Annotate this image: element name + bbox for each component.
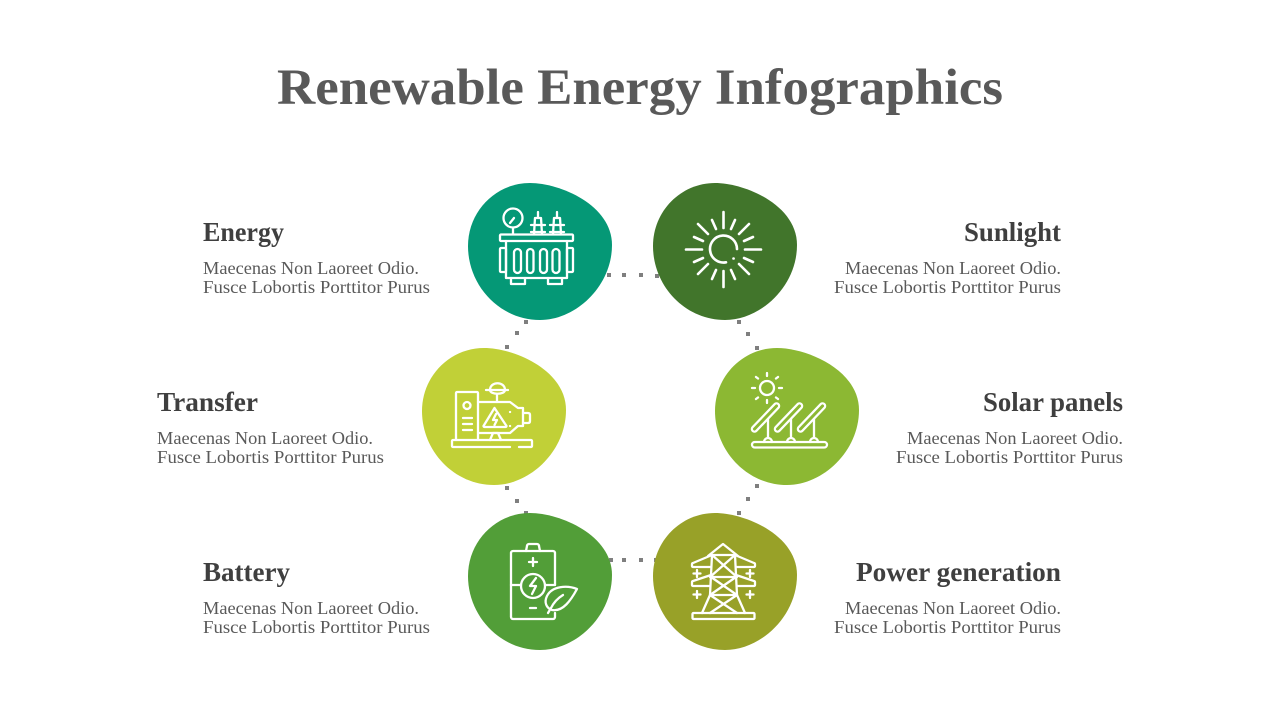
solar panels description: Maecenas Non Laoreet Odio. xyxy=(907,428,1123,448)
icon: transformer xyxy=(500,208,573,284)
solar panels heading: Solar panels xyxy=(983,387,1123,417)
icon: solar panels xyxy=(752,373,827,448)
transfer description: Maecenas Non Laoreet Odio. xyxy=(157,428,373,448)
icon: pylon xyxy=(692,544,755,619)
sunlight blob xyxy=(653,183,797,320)
power generation heading: Power generation xyxy=(856,557,1061,587)
solar panels description xyxy=(896,428,1123,467)
transfer description xyxy=(157,428,384,467)
solar panels blob xyxy=(715,348,859,485)
energy blob xyxy=(468,183,612,320)
transfer heading: Transfer xyxy=(157,387,258,417)
sunlight description: Maecenas Non Laoreet Odio. xyxy=(845,258,1061,278)
panel: sunlight xyxy=(653,183,1061,320)
battery blob xyxy=(468,513,612,650)
panel: solar panels xyxy=(715,348,1123,485)
energy description: Fusce Lobortis Porttitor Purus xyxy=(203,277,430,297)
icon: generator xyxy=(452,383,532,447)
solar panels description: Fusce Lobortis Porttitor Purus xyxy=(896,447,1123,467)
icon: sun xyxy=(686,212,761,287)
battery heading: Battery xyxy=(203,557,290,587)
panel: power generation xyxy=(653,513,1061,650)
sunlight description xyxy=(834,258,1061,297)
title: Renewable Energy Infographics xyxy=(277,60,1003,116)
power generation description: Fusce Lobortis Porttitor Purus xyxy=(834,617,1061,637)
sunlight heading: Sunlight xyxy=(964,217,1061,247)
transfer description: Fusce Lobortis Porttitor Purus xyxy=(157,447,384,467)
energy description xyxy=(203,258,430,297)
power generation blob xyxy=(653,513,797,650)
panel: energy xyxy=(203,183,612,320)
battery description: Maecenas Non Laoreet Odio. xyxy=(203,598,419,618)
energy description: Maecenas Non Laoreet Odio. xyxy=(203,258,419,278)
power generation description xyxy=(834,598,1061,637)
energy heading: Energy xyxy=(203,217,284,247)
panel: battery xyxy=(203,513,612,650)
power generation description: Maecenas Non Laoreet Odio. xyxy=(845,598,1061,618)
sunlight description: Fusce Lobortis Porttitor Purus xyxy=(834,277,1061,297)
battery description xyxy=(203,598,430,637)
battery description: Fusce Lobortis Porttitor Purus xyxy=(203,617,430,637)
icon: battery with leaf xyxy=(511,544,577,619)
panel: transfer xyxy=(157,348,566,485)
transfer blob xyxy=(422,348,566,485)
dotted connectors xyxy=(505,273,759,562)
